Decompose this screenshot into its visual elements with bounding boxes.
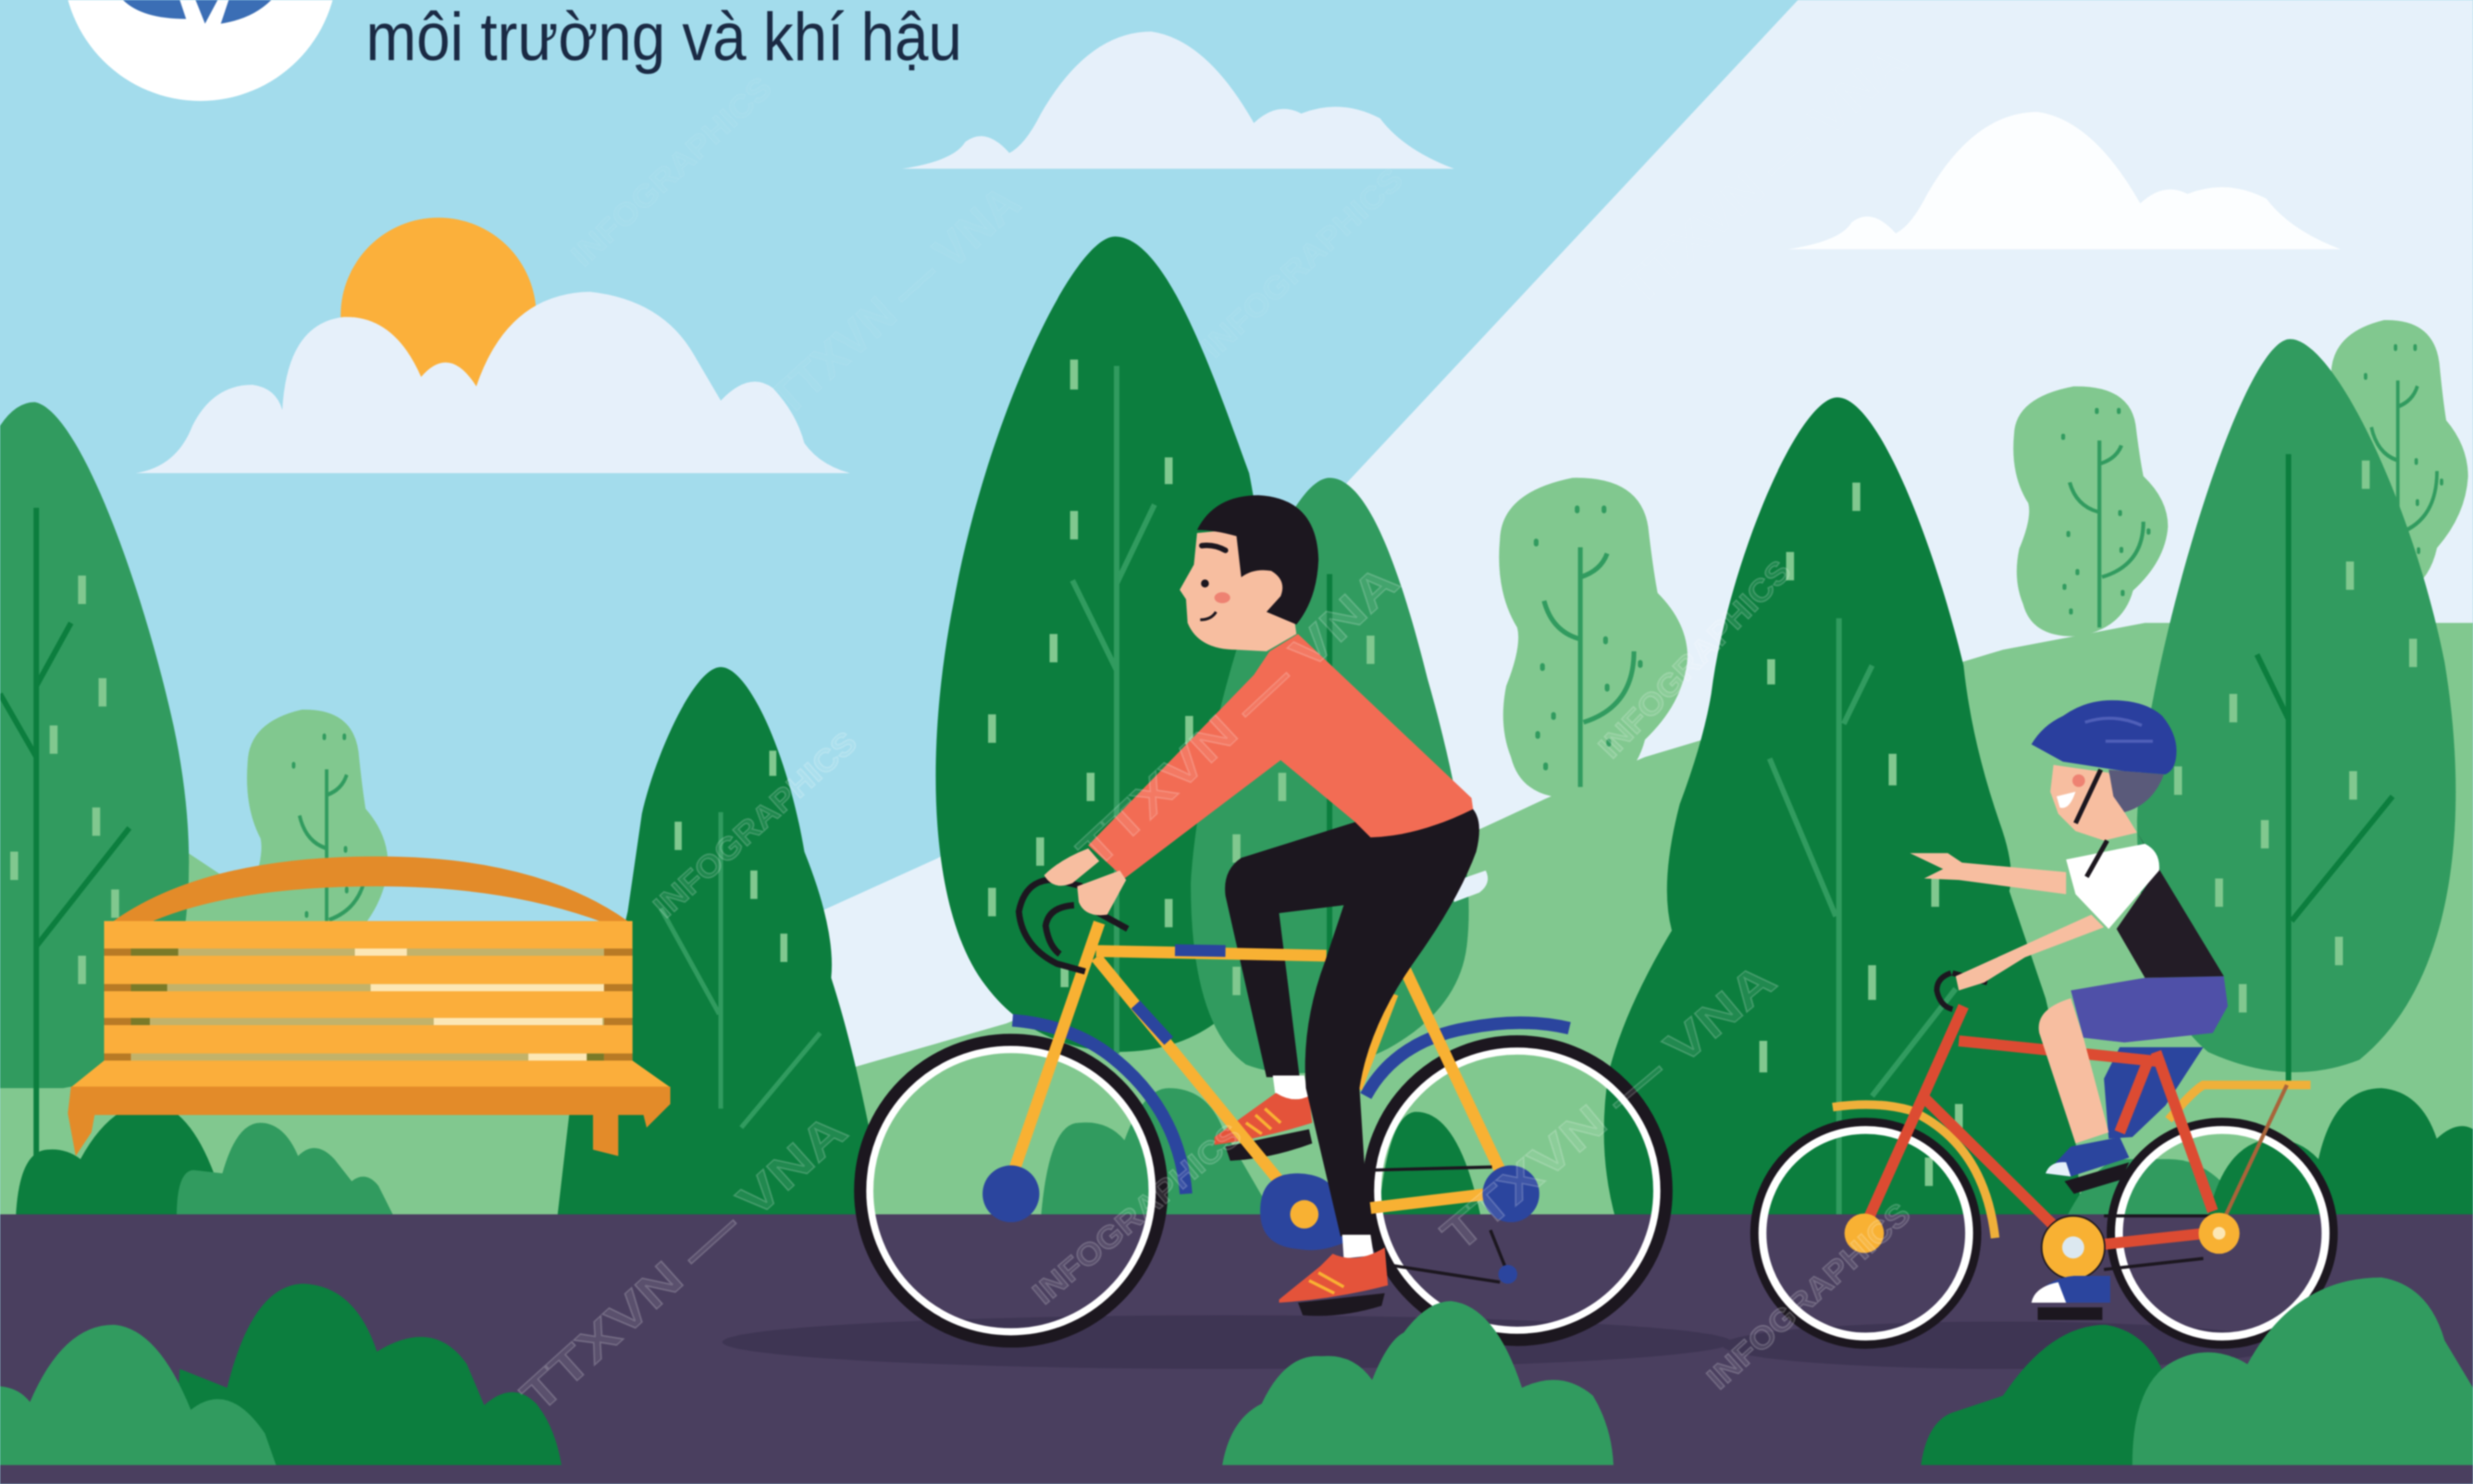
frame — [1869, 1007, 2213, 1244]
front wheel — [1755, 1122, 1977, 1344]
hub rear — [1482, 1166, 1539, 1222]
cyclist: child on red bicycle — [1755, 700, 2333, 1344]
fenders and rack — [1833, 1085, 2310, 1238]
front hub — [1845, 1214, 1884, 1253]
bushes: behind bench dark — [16, 1102, 215, 1218]
tree: mid green right — [2137, 339, 2455, 1088]
chain — [2104, 1216, 2220, 1269]
cloud: in front of sun — [136, 291, 850, 473]
hill: light green right — [836, 623, 2473, 1222]
hub front — [983, 1166, 1039, 1222]
bench — [68, 857, 671, 1156]
face — [2050, 765, 2137, 841]
sun — [340, 217, 537, 414]
cloud: top right — [1788, 112, 2341, 249]
subtitle text: môi trường và khí hậu — [365, 0, 962, 75]
foreground bushes: left mid — [0, 1325, 276, 1465]
bush: far right dark — [2208, 1088, 2473, 1218]
lower arm — [1956, 915, 2104, 990]
near leg — [2039, 998, 2108, 1144]
hill: light green left — [0, 833, 631, 1222]
rear hub — [2198, 1213, 2240, 1254]
watermarks: TTXVN — VNA — [1067, 554, 1409, 878]
tree: light tree near right — [2013, 387, 2168, 637]
foreground bush: centre — [1222, 1301, 1614, 1465]
foreground bush: right dark — [1921, 1325, 2169, 1465]
watermarks: INFOGRAPHICS — [1700, 1196, 1918, 1396]
watermarks — [511, 33, 1918, 1422]
rack strut — [2225, 1085, 2287, 1216]
bush: behind child bike mid — [2066, 1159, 2247, 1218]
watermarks: TTXVN — VNA — [1612, 33, 1917, 315]
tree: dark green near bench — [557, 667, 871, 1222]
helmet strap — [2075, 770, 2108, 877]
smile — [2057, 792, 2075, 808]
vest — [2117, 833, 2224, 978]
near leg — [1305, 808, 1479, 1236]
far leg — [2104, 1047, 2203, 1139]
bike shadow: man — [723, 1316, 1732, 1369]
near shoe and sock — [1280, 1235, 1388, 1316]
tree: light tree far right — [2331, 320, 2468, 599]
foreground bushes: left dark — [174, 1284, 562, 1465]
rear wheel — [1368, 1042, 1666, 1340]
hair — [1197, 495, 1318, 625]
lower foot — [2032, 1276, 2110, 1320]
tree: light tree centre — [1499, 477, 1688, 798]
foreground bush: right mid — [2133, 1278, 2473, 1465]
tree: dark green right — [1604, 398, 2082, 1222]
logo leaf mark — [123, 0, 271, 24]
tree: mid green far left — [0, 402, 189, 1159]
logo badge — [63, 0, 338, 101]
tree: small light tree behind bench — [247, 710, 388, 985]
watermarks: INFOGRAPHICS — [564, 70, 779, 274]
watermarks: INFOGRAPHICS — [647, 724, 864, 925]
rear wheel — [2111, 1122, 2333, 1344]
ear — [1251, 573, 1280, 600]
upper shoe — [2046, 1137, 2129, 1193]
front wheel — [860, 1040, 1162, 1342]
far shoe and sock — [1215, 1076, 1312, 1161]
face details — [1200, 545, 1230, 620]
tree: mid green behind man — [1191, 477, 1469, 1073]
shirt — [1088, 634, 1473, 878]
chainring — [2042, 1216, 2105, 1279]
sleeve — [2066, 844, 2159, 929]
watermarks: INFOGRAPHICS — [1592, 553, 1798, 765]
mountain — [820, 0, 2473, 1135]
shorts — [2071, 976, 2228, 1043]
watermarks: INFOGRAPHICS — [1026, 1118, 1248, 1312]
hands — [1045, 848, 1126, 915]
bike shadow: child — [1723, 1321, 2283, 1369]
neck and face — [1180, 528, 1296, 651]
saddle — [1450, 871, 1488, 902]
road — [0, 1215, 2473, 1484]
chain and derailleur — [1370, 1167, 1517, 1284]
cloud: top centre — [902, 31, 1454, 168]
watermarks: TTXVN — VNA — [760, 175, 1030, 426]
cheek — [2072, 774, 2085, 787]
pointing arm — [1910, 853, 2066, 894]
hair — [2108, 770, 2164, 812]
tree: dark green tall centre — [935, 237, 1267, 1054]
fenders — [1012, 1020, 1569, 1193]
handlebar — [1936, 973, 1987, 1009]
bush: behind front wheel — [1041, 1088, 1274, 1218]
watermarks: TTXVN — VNA — [1431, 953, 1786, 1262]
far leg — [1225, 822, 1388, 1077]
bush: behind rear wheel — [1379, 1112, 1481, 1218]
helmet — [2032, 700, 2177, 774]
bushes: behind bench mid — [177, 1123, 394, 1218]
watermarks: TTXVN — VNA — [511, 1104, 857, 1422]
cyclist: man on yellow bicycle — [860, 495, 1666, 1342]
frame — [1014, 922, 1500, 1208]
watermarks: INFOGRAPHICS — [1195, 162, 1410, 365]
handlebars — [1019, 880, 1128, 971]
chainring — [1260, 1173, 1354, 1250]
